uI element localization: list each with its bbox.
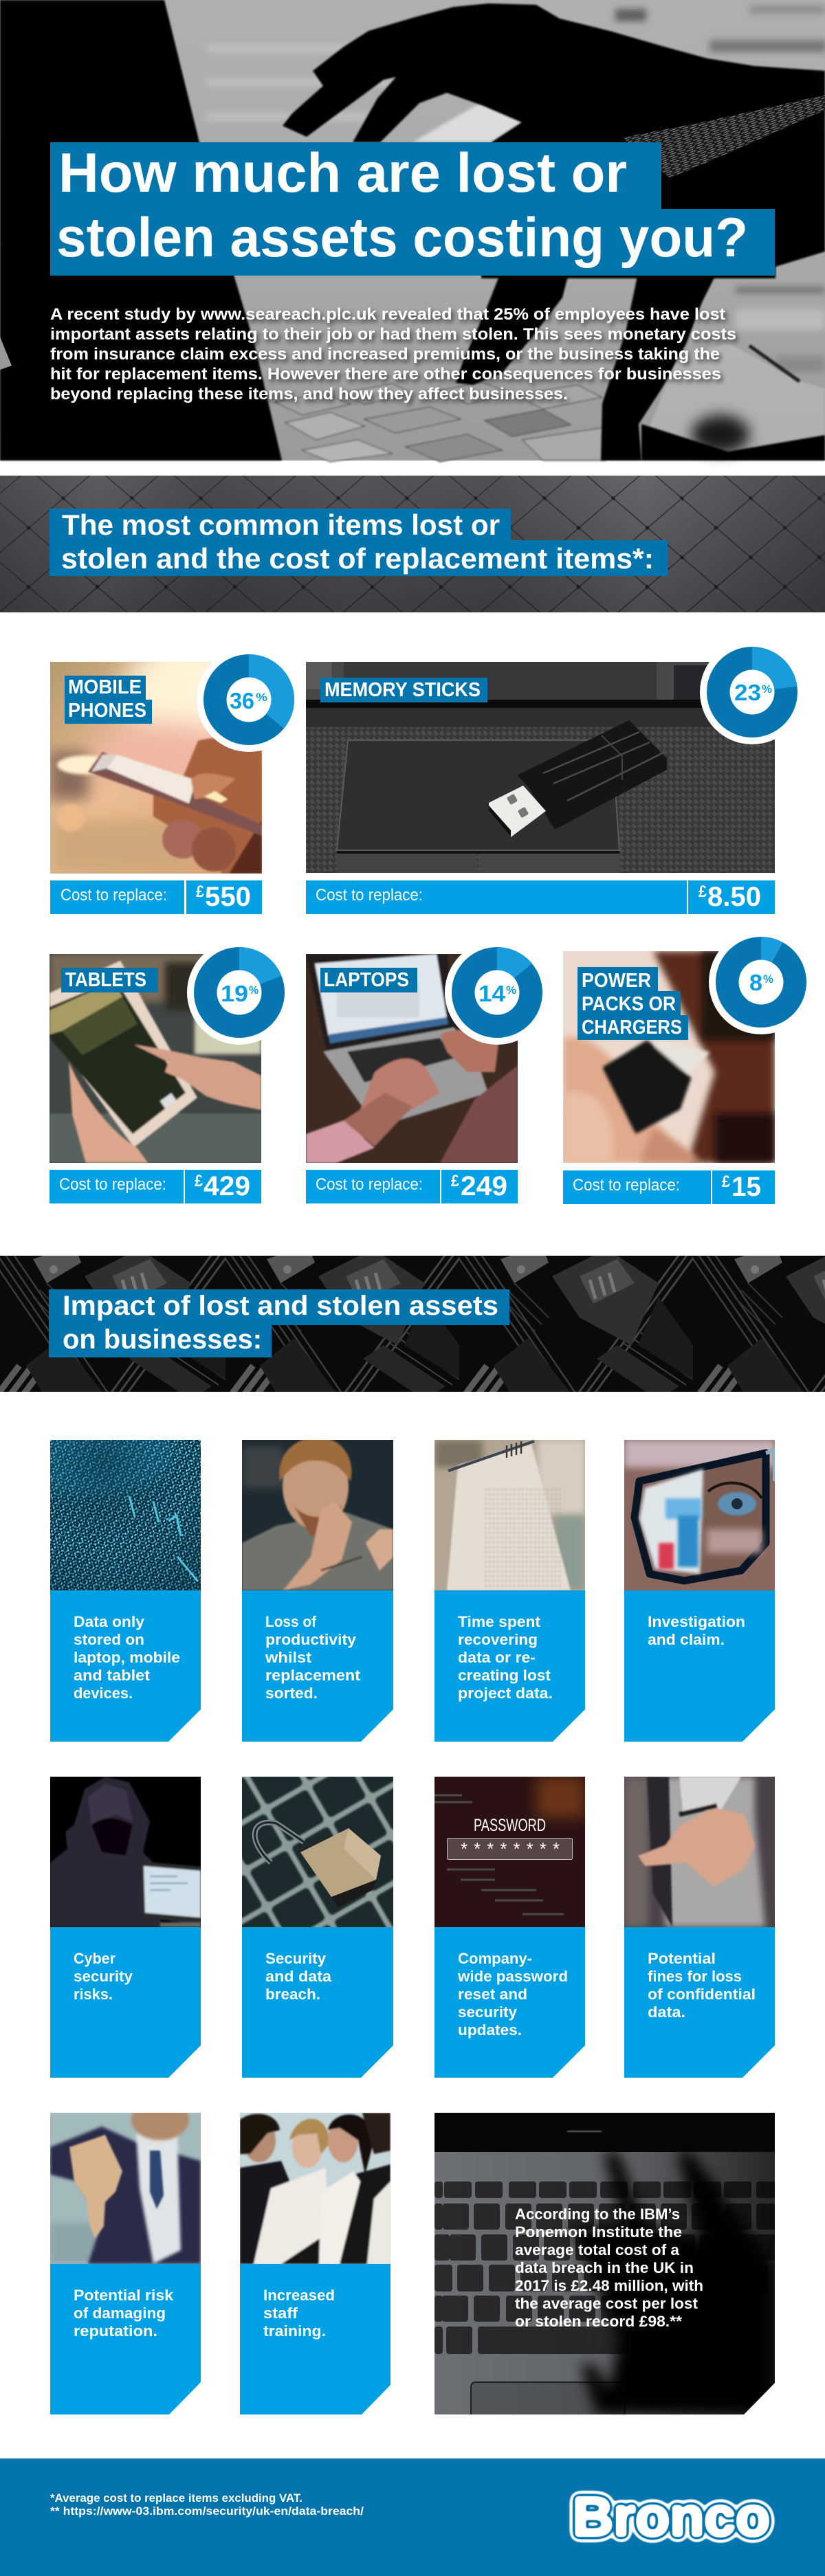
card: loss of productivity: [242, 1436, 393, 1742]
callout: data breach cost: [434, 2113, 777, 2423]
label: power packs or chargers: [578, 967, 688, 1040]
text panel: devices.: [74, 1685, 133, 1702]
text panel: [240, 2264, 390, 2414]
text panel: stored on: [74, 1631, 144, 1648]
donut chart: 8%: %: [763, 973, 773, 986]
cost bar: £429: 429: [204, 1171, 250, 1201]
cost bar: £429: £: [195, 1172, 204, 1190]
logo: Bronco: Bronco: [573, 2486, 770, 2547]
donut chart: 23%: 23: [734, 680, 761, 705]
callout text: the average cost per lost: [515, 2295, 698, 2312]
intro text block: important assets relating to their job or had them stolen. This sees monetary costs: [50, 325, 736, 344]
card: data only stored on devices: [0, 1337, 305, 1742]
intro text block: A recent study by www.seareach.plc.uk revealed that 25% of employees have lost: [50, 305, 725, 324]
photo: fingers holding usb charger plug: [563, 951, 775, 1163]
text panel: recovering: [458, 1631, 538, 1648]
cost bar: £429: Cost to replace:: [59, 1175, 166, 1194]
callout text: or stolen record £98.**: [515, 2313, 682, 2330]
heading: impact of lost and stolen assets: Impact of lost and stolen assets: [63, 1291, 498, 1321]
text panel: and claim.: [648, 1631, 725, 1648]
card: increased staff training: [240, 2113, 390, 2414]
text panel: of confidential: [648, 1986, 756, 2003]
label: mobile phones: MOBILE: [68, 676, 142, 698]
donut chart: 19%: %: [249, 984, 258, 997]
card: cyber security risks: [50, 1777, 201, 2078]
text panel: [434, 1927, 585, 2078]
photo: open padlock on keyboard: [242, 1777, 393, 1927]
text panel: [50, 1927, 201, 2078]
cost bar: £15: £: [722, 1173, 731, 1191]
donut chart: 14%: [445, 940, 549, 1045]
heading: impact of lost and stolen assets: [49, 1289, 509, 1357]
cost bar: £550: [50, 880, 262, 914]
card: company-wide password reset: [434, 1777, 585, 2078]
panel: memory sticks: [306, 640, 804, 914]
text panel: [50, 2264, 201, 2414]
text panel: [624, 1590, 775, 1742]
banner: server rack background: [0, 1256, 825, 1392]
text panel: [434, 1590, 585, 1742]
banner: chain-link fence background: [0, 476, 825, 612]
photo: eye behind glasses: [624, 1440, 775, 1590]
text panel: Potential: [648, 1950, 716, 1967]
text panel: wide password: [457, 1968, 568, 1985]
footnotes: *Average cost to replace items excluding VAT.: [50, 2491, 302, 2505]
text panel: data.: [648, 2003, 685, 2021]
text panel: Loss of: [265, 1613, 317, 1630]
text panel: fines for loss: [648, 1968, 742, 1985]
photo: password field on screen: PASSWORD: [474, 1816, 546, 1835]
callout text: [515, 2206, 703, 2330]
intro text block: from insurance claim excess and increased premiums, or the business taking the: [50, 345, 720, 364]
photo: laptop keyboard with shadow of hand: [434, 2113, 777, 2423]
cost bar: £8.50: [306, 880, 775, 914]
donut chart: 23%: [700, 640, 804, 744]
text panel: Company-: [458, 1950, 532, 1967]
cost bar: £8.50: Cost to replace:: [316, 886, 423, 904]
photo: business people at training: [240, 2113, 390, 2264]
text panel: [50, 1590, 201, 1742]
photo: businessman open hand: [624, 1777, 775, 1927]
cost bar: £15: Cost to replace:: [573, 1176, 680, 1195]
keyboard keys: [275, 382, 605, 462]
cost bar: £550: 550: [205, 882, 251, 912]
footer band: [0, 2458, 825, 2576]
photo: usb memory stick on laptop: [306, 662, 775, 873]
photo: desk calendar: [434, 1440, 585, 1590]
donut chart: 23%: %: [762, 682, 772, 696]
card: security and data breach: [165, 1704, 472, 2078]
text panel: security: [458, 2003, 518, 2021]
text panel: productivity: [265, 1631, 357, 1648]
donut chart: 14%: %: [506, 984, 516, 997]
photo: password field on screen: ********: [461, 1839, 560, 1859]
text panel: Investigation: [648, 1613, 745, 1630]
card: time spent recovering data: [434, 1440, 585, 1742]
text panel: sorted.: [265, 1685, 318, 1702]
text panel: project data.: [458, 1685, 553, 1702]
text panel: Data only: [74, 1613, 145, 1630]
text panel: replacement: [265, 1667, 361, 1684]
text panel: training.: [263, 2322, 326, 2340]
card: potential fines: [624, 1777, 775, 2078]
donut chart: 36%: 36: [230, 688, 254, 713]
panel: laptops: [306, 940, 549, 1203]
panel: tablets: [50, 940, 292, 1203]
panel: mobile phones: [50, 634, 301, 914]
label: power packs or chargers: POWER: [582, 970, 651, 992]
text panel: laptop, mobile: [74, 1649, 180, 1666]
title: how much are lost or stolen assets costing you: How much are lost or: [58, 142, 627, 204]
text panel: [242, 1590, 393, 1742]
callout text: According to the IBM’s: [515, 2206, 680, 2223]
text panel: whilst: [265, 1649, 312, 1666]
donut chart: 19%: [187, 940, 292, 1045]
hero section background photo: [0, 0, 825, 462]
heading: most common items: stolen and the cost of replacement items*:: [61, 542, 654, 575]
callout text: average total cost of a: [515, 2241, 680, 2258]
photo: digital data: [50, 1440, 201, 1590]
text panel: security: [74, 1968, 133, 1985]
text panel: [242, 1927, 393, 2078]
donut chart: 8%: [709, 930, 813, 1034]
text panel: data or re-: [458, 1649, 536, 1666]
text panel: [624, 1927, 775, 2078]
text panel: risks.: [74, 1986, 113, 2003]
heading: most common items: [50, 509, 668, 576]
panel: power packs or chargers: [563, 930, 813, 1204]
title: how much are lost or stolen assets costing you: stolen assets costing you?: [56, 207, 748, 269]
text panel: Cyber: [74, 1950, 116, 1967]
heading: most common items: The most common items lost or: [62, 509, 500, 541]
cost bar: £8.50: 8.50: [707, 882, 761, 912]
text panel: Potential risk: [74, 2287, 174, 2304]
card: investigation and claim: [624, 1440, 775, 1742]
cost bar: £15: 15: [732, 1172, 761, 1202]
photo: hands using tablet: [50, 954, 261, 1163]
cost bar: £249: Cost to replace:: [316, 1175, 423, 1194]
callout text: 2017 is £2.48 million, with: [515, 2277, 703, 2294]
text panel: updates.: [458, 2021, 522, 2039]
cost bar: £429: [50, 1170, 261, 1203]
cost bar: £249: [306, 1170, 518, 1203]
text panel: Increased: [263, 2287, 335, 2304]
intro text block: beyond replacing these items, and how they affect businesses.: [50, 385, 568, 403]
cost bar: £550: Cost to replace:: [60, 886, 167, 904]
intro text block: [50, 305, 736, 403]
label: tablets: TABLETS: [65, 969, 146, 991]
label: power packs or chargers: PACKS OR: [582, 993, 676, 1015]
donut chart: 8%: 8: [749, 970, 762, 995]
label: power packs or chargers: CHARGERS: [582, 1017, 682, 1039]
label: memory sticks: MEMORY STICKS: [324, 679, 481, 701]
label: laptops: LAPTOPS: [324, 969, 409, 991]
text panel: reset and: [458, 1986, 527, 2003]
cost bar: £8.50: £: [698, 882, 707, 901]
card: damaging reputation: [50, 2099, 201, 2414]
photo: tired man rubbing eyes: [242, 1440, 393, 1590]
text panel: Time spent: [458, 1613, 541, 1630]
text panel: of damaging: [74, 2305, 166, 2322]
usb stick: [489, 720, 667, 837]
photo: hand holding smartphone: [50, 662, 262, 874]
cost bar: £249: £: [451, 1172, 460, 1190]
text panel: staff: [263, 2305, 298, 2322]
text panel: Security: [265, 1950, 327, 1967]
label: mobile phones: PHONES: [68, 700, 146, 722]
cost bar: £550: £: [196, 882, 205, 901]
photo: hands typing on laptop: [306, 954, 518, 1163]
photo: hooded hacker at laptop: [50, 1777, 201, 1927]
cost bar: £249: 249: [461, 1171, 507, 1201]
text panel: and tablet: [74, 1667, 151, 1684]
photo: password field on screen: [434, 1777, 585, 1927]
text panel: breach.: [265, 1986, 320, 2003]
donut chart: 14%: 14: [478, 981, 506, 1006]
title: how much are lost or stolen assets costing you: [50, 142, 775, 276]
intro text block: hit for replacement items. However there are other consequences for businesses: [50, 365, 721, 384]
photo: businessman thumbs down: [50, 2113, 201, 2264]
donut chart: 36%: [197, 647, 301, 752]
text panel: and data: [265, 1968, 332, 1985]
cost bar: £15: [563, 1170, 775, 1204]
donut chart: 36%: %: [256, 691, 267, 704]
text panel: reputation.: [74, 2322, 157, 2340]
footnotes: [50, 2491, 364, 2518]
label: mobile phones: [65, 676, 152, 724]
callout text: data breach in the UK in: [515, 2259, 694, 2276]
footnotes: ** https://www-03.ibm.com/security/uk-en/data-breach/: [50, 2505, 364, 2518]
donut chart: 19%: 19: [221, 981, 248, 1006]
text panel: creating lost: [458, 1667, 551, 1684]
heading: impact of lost and stolen assets: on businesses:: [63, 1324, 262, 1355]
callout text: Ponemon Institute the: [515, 2223, 682, 2241]
